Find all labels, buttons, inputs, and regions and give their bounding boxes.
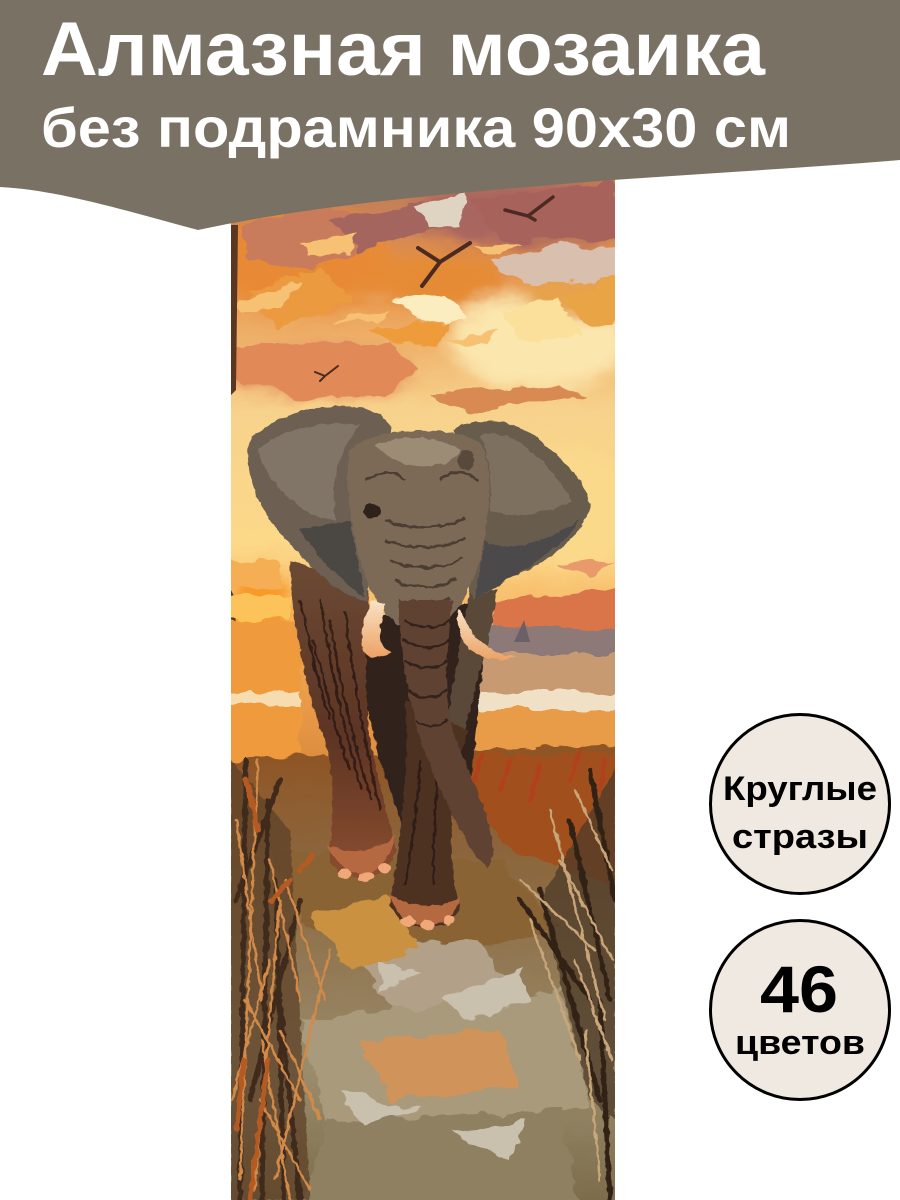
badge: 46 colours [710, 920, 890, 1100]
sailboat [514, 620, 530, 642]
ground path [221, 745, 635, 1200]
badge: round rhinestones [710, 714, 890, 894]
horizon and sea [221, 560, 630, 760]
left ear [248, 406, 391, 602]
sky background [231, 180, 615, 758]
badge: round rhinestones: стразы [732, 818, 868, 856]
grass right [475, 750, 615, 1200]
head [348, 430, 489, 625]
front centre leg [390, 700, 468, 928]
grass left [231, 760, 330, 1200]
eyes [363, 450, 474, 518]
feet and toenails [328, 835, 460, 930]
panel: elephant painting [231, 180, 615, 1200]
badge: 46 colours: цветов [735, 1024, 865, 1062]
left tree trunk [231, 225, 238, 622]
badge: round rhinestones: Круглые [723, 770, 877, 808]
right body side [449, 589, 498, 730]
birds [315, 197, 553, 381]
trunk [398, 600, 494, 868]
title: Алмазная мозаика [41, 7, 766, 92]
clouds [241, 208, 358, 270]
left front leg and body [290, 560, 396, 878]
header banner [0, 0, 900, 230]
tusks [361, 600, 516, 660]
right ear [453, 421, 590, 600]
far hind shade [365, 604, 484, 824]
elephant [248, 406, 590, 930]
badge: 46 colours: 46 [760, 952, 838, 1026]
subtitle: без подрамника 90х30 см [41, 96, 791, 159]
